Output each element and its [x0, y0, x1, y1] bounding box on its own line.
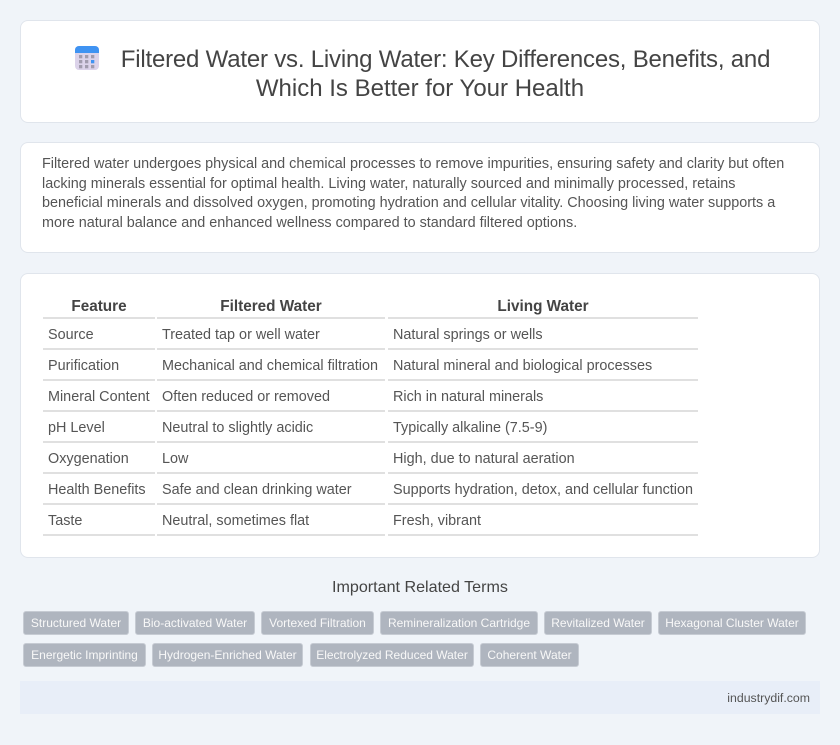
related terms tags: Energetic Imprinting [31, 648, 138, 662]
related terms tags [23, 611, 806, 667]
related terms heading: Important Related Terms [332, 578, 508, 596]
panel: header [20, 20, 820, 123]
table header: Living Water [497, 298, 589, 315]
related terms tags: Electrolyzed Reduced Water [316, 648, 468, 662]
row: taste: Neutral, sometimes flat [162, 513, 309, 529]
intro text: beneficial minerals and dissolved oxygen, promoting hydration and cellular vitality. Choosing living water supports a [42, 195, 775, 211]
row: taste: Fresh, vibrant [393, 513, 481, 529]
row: oxygenation: Low [162, 451, 188, 467]
intro text: more natural balance and enhanced wellness compared to standard filtered options. [42, 215, 577, 231]
footer bar [20, 681, 820, 714]
related terms tags: Revitalized Water [551, 616, 645, 630]
intro text: lacking minerals essential for optimal health. Living water, naturally sourced and minimally processed, retains [42, 176, 735, 192]
row: source: Source [48, 327, 94, 343]
row: source [43, 327, 698, 350]
related terms tags: Coherent Water [487, 648, 572, 662]
row: oxygenation: Oxygenation [48, 451, 129, 467]
intro text: Filtered water undergoes physical and chemical processes to remove impurities, ensuring safety and clarity but often [42, 156, 784, 172]
row: source: Natural springs or wells [393, 327, 543, 343]
title: Filtered Water vs. Living Water: Key Differences, Benefits, and [121, 46, 770, 73]
related terms tags: Structured Water [31, 616, 121, 630]
panel: intro [20, 142, 820, 253]
row: purification: Natural mineral and biological processes [393, 358, 652, 374]
row: taste [43, 513, 698, 536]
title: Which Is Better for Your Health [256, 75, 584, 102]
row: source: Treated tap or well water [162, 327, 320, 343]
row: purification: Purification [48, 358, 119, 374]
table header: Feature [71, 298, 127, 315]
title [121, 46, 770, 102]
icon: calendar grid [75, 46, 99, 70]
row: pH level: pH Level [48, 420, 105, 436]
row: mineral content: Mineral Content [48, 389, 150, 405]
row: health benefits [43, 482, 698, 505]
row: oxygenation [43, 451, 698, 474]
row: mineral content: Rich in natural minerals [393, 389, 543, 405]
intro text [42, 156, 784, 231]
related terms tags: Hydrogen-Enriched Water [158, 648, 297, 662]
row: taste: Taste [48, 513, 82, 529]
row: oxygenation: High, due to natural aeration [393, 451, 575, 467]
related terms tags: Hexagonal Cluster Water [665, 616, 799, 630]
table header: Filtered Water [220, 298, 322, 315]
row: purification: Mechanical and chemical filtration [162, 358, 378, 374]
row: mineral content [43, 389, 698, 412]
row: pH level: Neutral to slightly acidic [162, 420, 313, 436]
related terms tags: Remineralization Cartridge [388, 616, 530, 630]
row: health benefits: Supports hydration, detox, and cellular function [393, 482, 693, 498]
row: health benefits: Safe and clean drinking water [162, 482, 352, 498]
footer source: industrydif.com [727, 691, 810, 705]
row: pH level: Typically alkaline (7.5-9) [393, 420, 547, 436]
row: purification [43, 358, 698, 381]
panel: comparison table [20, 273, 820, 558]
related terms tags: Bio-activated Water [143, 616, 247, 630]
related terms tags: Vortexed Filtration [269, 616, 366, 630]
row: pH level [43, 420, 698, 443]
table header [43, 298, 698, 319]
row: mineral content: Often reduced or removed [162, 389, 330, 405]
row: health benefits: Health Benefits [48, 482, 146, 498]
